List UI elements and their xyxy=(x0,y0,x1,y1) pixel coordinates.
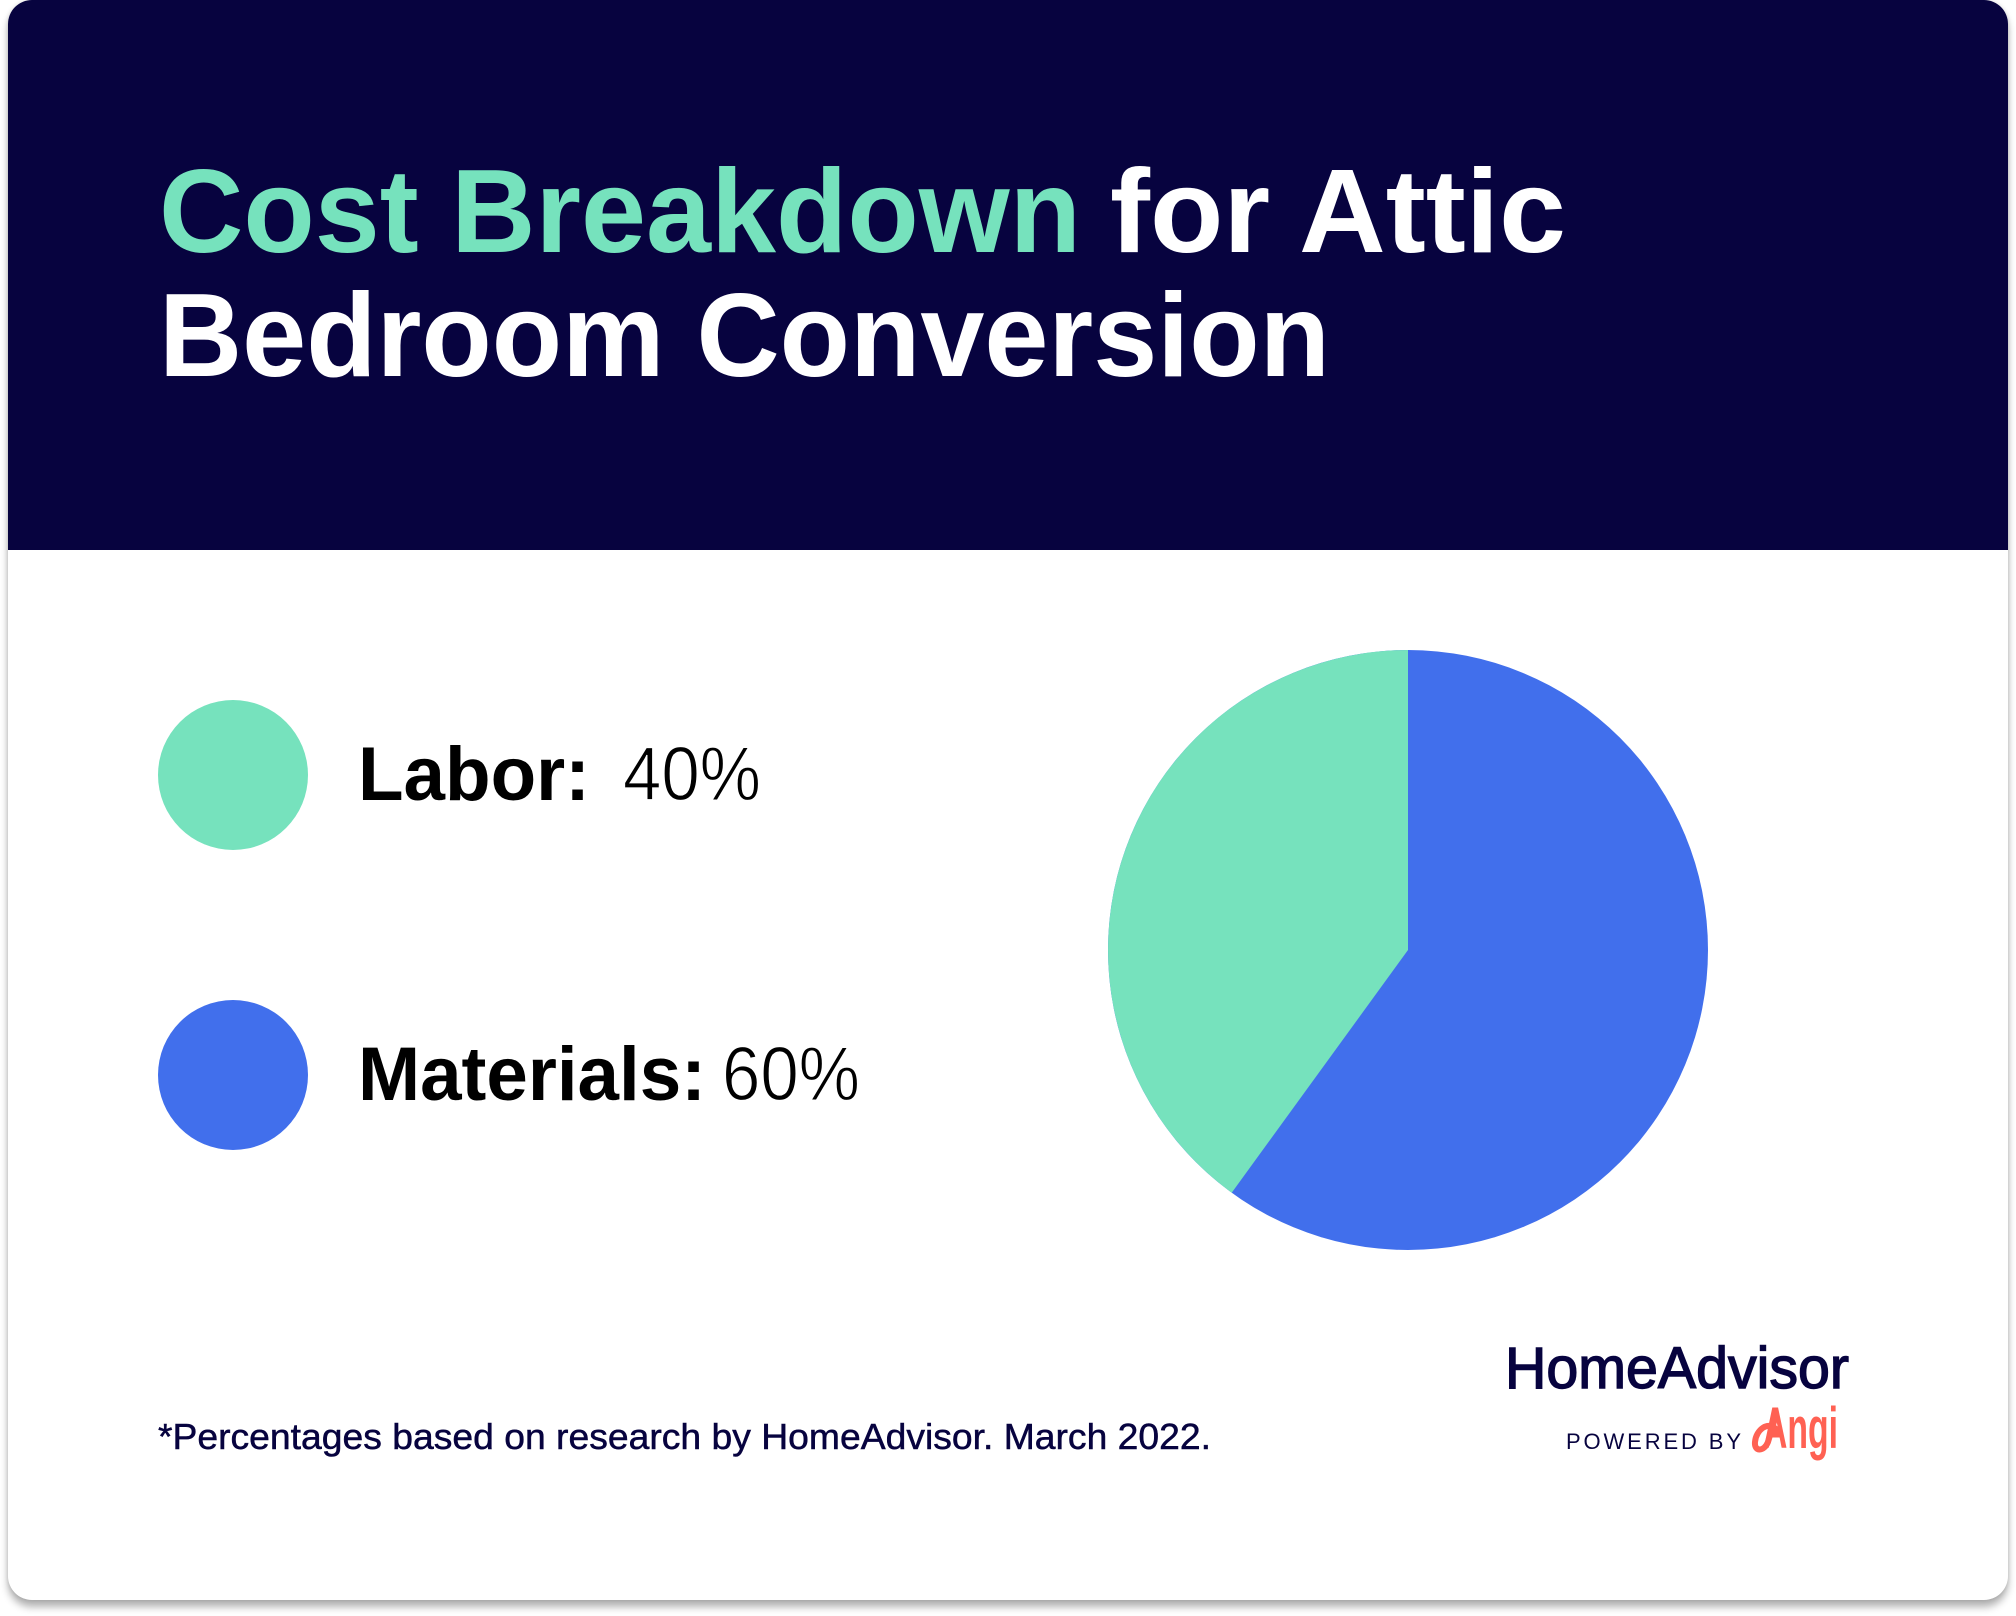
title: Bedroom Conversion xyxy=(159,269,1330,402)
title: Cost Breakdown xyxy=(159,145,1081,278)
legend: labor: 40% xyxy=(623,732,761,817)
logo: HomeAdvisor powered by Angi xyxy=(1505,1336,1849,1461)
logo: HomeAdvisor powered by Angi: POWERED BY xyxy=(1566,1429,1741,1454)
footnote: *Percentages based on research by HomeAdvisor. March 2022. xyxy=(158,1416,1211,1457)
legend: labor: Labor: xyxy=(358,732,590,817)
legend: materials: Materials: xyxy=(358,1032,706,1117)
logo: HomeAdvisor powered by Angi: HomeAdvisor xyxy=(1505,1336,1849,1401)
legend: materials: 60% xyxy=(722,1032,860,1117)
logo: HomeAdvisor powered by Angi: Angi xyxy=(1763,1396,1838,1461)
title: for Attic xyxy=(1110,145,1566,278)
pie chart xyxy=(1108,650,1708,1250)
title xyxy=(159,145,1566,402)
legend: labor xyxy=(158,700,761,850)
panel: navy header band xyxy=(8,0,2008,550)
legend: materials xyxy=(158,1000,860,1150)
